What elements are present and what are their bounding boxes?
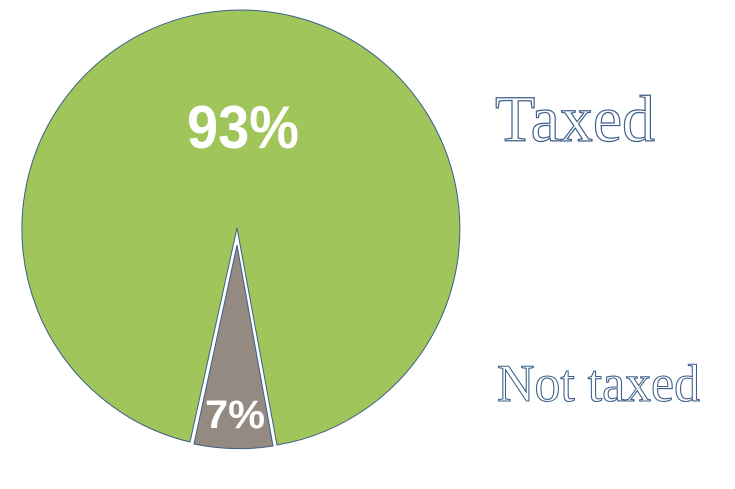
legend: Taxed: Taxed — [495, 83, 655, 156]
label: 93%: 93% — [187, 94, 299, 161]
slice: taxed 93% — [22, 10, 460, 445]
slice: not taxed 7% — [194, 245, 273, 449]
pie chart — [22, 10, 460, 449]
label: 7%: 7% — [205, 393, 265, 437]
legend: Not taxed: Not taxed — [497, 355, 700, 413]
